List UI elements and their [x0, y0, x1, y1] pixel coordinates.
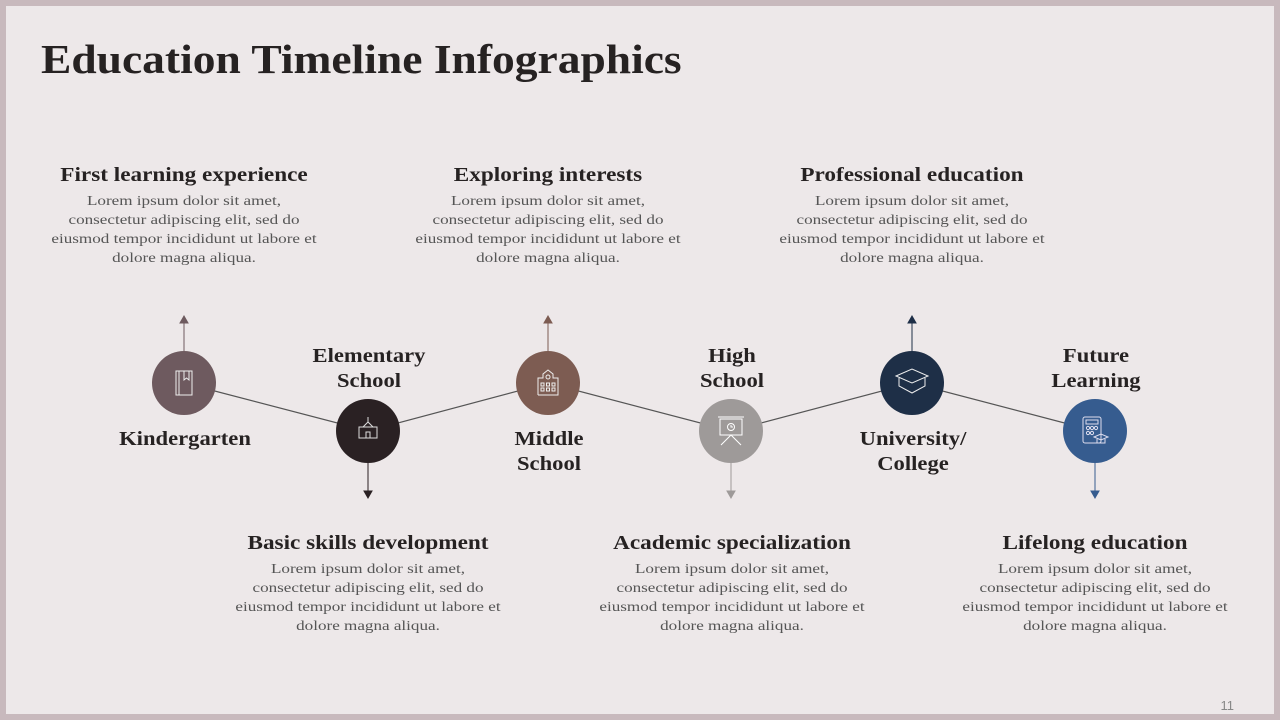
- arrow: high: [727, 463, 735, 498]
- label: high: School: [700, 370, 764, 392]
- text block: exploring: dolore magna aliqua.: [476, 251, 620, 266]
- arrow: middle: [544, 316, 552, 351]
- arrow: elementary: [364, 463, 372, 498]
- text block: lifelong: Lorem ipsum dolor sit amet,: [998, 562, 1192, 577]
- label: university: College: [877, 453, 949, 475]
- text block: lifelong: dolore magna aliqua.: [1023, 619, 1167, 634]
- page number: 11: [1220, 698, 1234, 713]
- text block: professional: dolore magna aliqua.: [840, 251, 984, 266]
- text block: exploring: Exploring interests: [454, 164, 642, 186]
- text block: exploring: [415, 164, 681, 266]
- text block: academic: Lorem ipsum dolor sit amet,: [635, 562, 829, 577]
- icon: school building: [336, 399, 400, 463]
- label: elementary: Elementary: [312, 345, 425, 367]
- text block: basic skills: [235, 532, 501, 634]
- label: high: [700, 345, 764, 392]
- icon: book: [152, 351, 216, 415]
- text block: basic skills: eiusmod tempor incididunt ut labore et: [235, 600, 501, 615]
- text block: lifelong: eiusmod tempor incididunt ut labore et: [962, 600, 1228, 615]
- text block: first learning: dolore magna aliqua.: [112, 251, 256, 266]
- text block: first learning: Lorem ipsum dolor sit amet,: [87, 194, 281, 209]
- text block: basic skills: dolore magna aliqua.: [296, 619, 440, 634]
- arrow: kindergarten: [180, 316, 188, 351]
- text block: academic: consectetur adipiscing elit, sed do: [617, 581, 847, 596]
- label: kindergarten: Kindergarten: [119, 428, 251, 450]
- label: middle: Middle: [514, 428, 584, 450]
- label: middle: School: [517, 453, 581, 475]
- label: future: Future: [1063, 345, 1129, 367]
- text block: professional: consectetur adipiscing elit, sed do: [797, 213, 1027, 228]
- text block: first learning: First learning experience: [60, 164, 308, 186]
- label: middle: [514, 428, 584, 475]
- text block: professional: [779, 164, 1045, 266]
- icon: presentation board: [699, 399, 763, 463]
- text block: lifelong: consectetur adipiscing elit, sed do: [980, 581, 1210, 596]
- text block: academic: Academic specialization: [613, 532, 851, 554]
- text block: first learning: consectetur adipiscing elit, sed do: [69, 213, 299, 228]
- arrow: future: [1091, 463, 1099, 498]
- text block: lifelong: [962, 532, 1228, 634]
- arrow: university: [908, 316, 916, 351]
- text block: professional: Professional education: [800, 164, 1024, 186]
- text block: basic skills: Lorem ipsum dolor sit amet,: [271, 562, 465, 577]
- text block: first learning: [51, 164, 317, 266]
- text block: academic: [599, 532, 865, 634]
- text block: exploring: consectetur adipiscing elit, sed do: [433, 213, 663, 228]
- text block: professional: Lorem ipsum dolor sit amet,: [815, 194, 1009, 209]
- label: university: [860, 428, 967, 475]
- label: university: University/: [860, 428, 966, 450]
- title: Education Timeline Infographics: [41, 36, 682, 82]
- text block: academic: eiusmod tempor incididunt ut labore et: [599, 600, 865, 615]
- icon: middle school: [516, 351, 580, 415]
- label: elementary: School: [337, 370, 401, 392]
- label: high: High: [708, 345, 756, 367]
- text block: academic: dolore magna aliqua.: [660, 619, 804, 634]
- text block: exploring: eiusmod tempor incididunt ut labore et: [415, 232, 681, 247]
- text block: basic skills: Basic skills development: [247, 532, 489, 554]
- text block: basic skills: consectetur adipiscing elit, sed do: [253, 581, 483, 596]
- text block: exploring: Lorem ipsum dolor sit amet,: [451, 194, 645, 209]
- text block: professional: eiusmod tempor incididunt ut labore et: [779, 232, 1045, 247]
- label: future: [1051, 345, 1141, 392]
- icon: calculator and cap: [1063, 399, 1127, 463]
- label: future: Learning: [1051, 370, 1141, 392]
- text block: first learning: eiusmod tempor incididunt ut labore et: [51, 232, 317, 247]
- icon: graduation cap: [880, 351, 944, 415]
- text block: lifelong: Lifelong education: [1003, 532, 1187, 554]
- label: elementary: [312, 345, 426, 392]
